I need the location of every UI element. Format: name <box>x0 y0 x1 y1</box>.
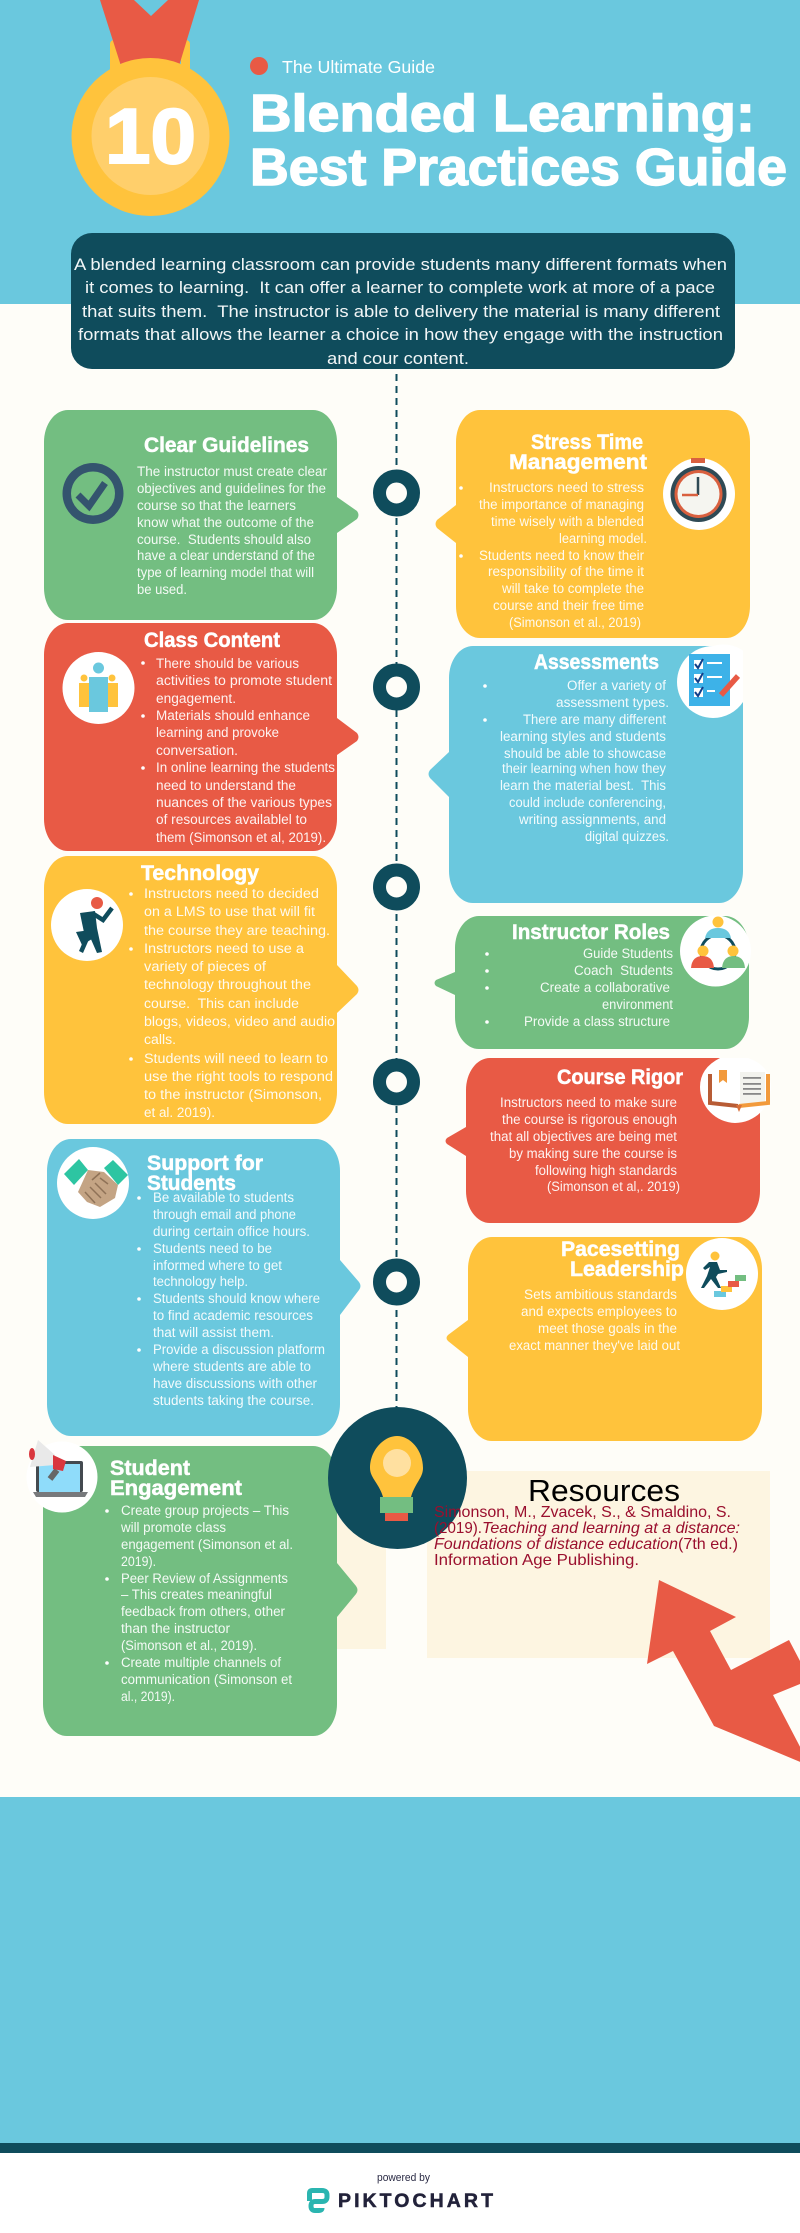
text: class content: Materials should enhance <box>156 708 310 723</box>
text: support for students <box>137 1190 325 1408</box>
text: instructor roles: Coach Students <box>574 963 673 978</box>
panel: assessments <box>428 645 743 903</box>
icon: medal <box>72 0 230 216</box>
heading: clear guidelines: Clear Guidelines <box>144 434 309 457</box>
text: student engagement: 2019). <box>121 1554 156 1569</box>
text: course rigor: Instructors need to make sure <box>500 1095 677 1110</box>
text: pacesetting leadership: Sets ambitious standards <box>524 1287 677 1302</box>
panel: resources background <box>427 1471 770 1658</box>
text: citation: (2019). <box>434 1520 482 1537</box>
text: student engagement: al., 2019). <box>121 1689 175 1704</box>
heading: pacesetting leadership: Pacesetting <box>561 1238 680 1261</box>
text: technology: Students will need to learn to <box>144 1051 328 1066</box>
text: instructor roles <box>485 946 673 1029</box>
text: course rigor: the course is rigorous enough <box>502 1112 677 1127</box>
icon: business person <box>51 889 123 961</box>
text: technology: on a LMS to use that will fit <box>144 904 315 919</box>
panel: introduction <box>71 233 735 369</box>
title: Best Practices Guide <box>250 139 787 197</box>
text: citation: Simonson, M., Zvacek, S., & Smaldino, S. <box>434 1504 731 1521</box>
text: course rigor: (Simonson et al,. 2019) <box>547 1179 680 1194</box>
text: course rigor: following high standards <box>535 1163 677 1178</box>
text: class content: engagement. <box>156 691 236 706</box>
heading: pacesetting leadership: Leadership <box>570 1258 684 1281</box>
icon: book <box>700 1058 771 1123</box>
footer: powered by: powered by <box>377 2172 430 2184</box>
timeline node 1 <box>380 476 414 510</box>
text: citation: (7th ed.) <box>678 1536 738 1553</box>
text: technology: Instructors need to use a <box>144 941 305 956</box>
text: technology: calls. <box>144 1032 176 1047</box>
title <box>250 85 787 197</box>
text: support for students: have discussions with other <box>153 1376 317 1391</box>
text: support for students: during certain office hours. <box>153 1224 310 1239</box>
text: technology: course. This can include <box>144 996 299 1011</box>
heading: support for students: Students <box>147 1172 236 1195</box>
text: student engagement: Peer Review of Assignments <box>121 1571 288 1586</box>
heading: technology: Technology <box>141 862 259 885</box>
heading: student engagement <box>110 1457 242 1500</box>
heading: student engagement: Student <box>110 1457 190 1480</box>
text: support for students: Be available to students <box>153 1190 294 1205</box>
text: support for students: technology help. <box>153 1274 248 1289</box>
text: assessments: digital quizzes. <box>585 829 669 844</box>
text: assessments: learn the material best. This <box>500 778 666 793</box>
heading: support for students: Support for <box>147 1152 263 1175</box>
text: class content: There should be various <box>156 656 299 671</box>
panel: introduction: formats that allows the learner a choice in how they engage with the instruction <box>78 326 723 344</box>
heading: stress time management: Management <box>509 451 647 474</box>
panel: course rigor <box>446 1058 771 1223</box>
text: student engagement: Create multiple channels of <box>121 1655 281 1670</box>
text: citation: Information Age Publishing. <box>434 1552 639 1569</box>
subtitle: The Ultimate Guide <box>282 57 435 77</box>
text: pacesetting leadership: and expects employees to <box>521 1304 677 1319</box>
text: student engagement: Create group projects – This <box>121 1503 289 1518</box>
text: clear guidelines <box>137 464 327 597</box>
text: stress time management: the importance of managing <box>479 497 644 512</box>
text: student engagement: will promote class <box>120 1520 226 1535</box>
text: student engagement: feedback from others, other <box>121 1604 285 1619</box>
text: clear guidelines: course. Students should also <box>137 532 311 547</box>
text: student engagement: (Simonson et al., 2019). <box>121 1638 257 1653</box>
text: clear guidelines: have a clear understand of the <box>137 548 315 563</box>
text: support for students: through email and phone <box>153 1207 296 1222</box>
footer blue band <box>0 1797 800 2143</box>
text: support for students: Provide a discussion platform <box>153 1342 325 1357</box>
heading: stress time management: Stress Time <box>531 431 643 454</box>
text: student engagement: communication (Simonson et <box>121 1672 292 1687</box>
text: assessments <box>483 678 669 844</box>
text: assessments: assessment types. <box>556 695 669 710</box>
text: class content: them (Simonson et al, 2019). <box>156 830 326 845</box>
panel: clear guidelines <box>44 410 358 620</box>
text: stress time management: will take to complete the <box>501 581 644 596</box>
panel: introduction: A blended learning classroom can provide students many different formats when <box>74 256 727 274</box>
text: stress time management: learning model. <box>559 531 647 546</box>
text: technology: variety of pieces of <box>144 959 266 974</box>
text: clear guidelines: know what the outcome of the <box>137 515 314 530</box>
text: instructor roles: Create a collaborative <box>540 980 670 995</box>
text: pacesetting leadership: meet those goals in the <box>538 1321 677 1336</box>
panel: support for students <box>47 1139 360 1436</box>
text: clear guidelines: type of learning model that will <box>137 565 314 580</box>
text: support for students: Students should know where <box>153 1291 320 1306</box>
text: student engagement: engagement (Simonson et al. <box>121 1537 293 1552</box>
text: course rigor: by making sure the course is <box>509 1146 677 1161</box>
panel: instructor roles <box>434 916 751 1049</box>
text: student engagement: – This creates meaningful <box>121 1587 272 1602</box>
text: class content: conversation. <box>156 743 238 758</box>
panel: introduction: that suits them. The instructor is able to delivery the material is many different <box>82 303 720 321</box>
panel: class content <box>44 623 358 851</box>
text: class content: activities to promote student <box>156 673 332 688</box>
text: stress time management <box>459 480 647 630</box>
panel: pacesetting leadership <box>446 1237 762 1441</box>
heading: instructor roles: Instructor Roles <box>512 921 670 944</box>
text: class content: In online learning the students <box>156 760 335 775</box>
heading: class content: Class Content <box>144 629 280 652</box>
footer dark bar <box>0 2143 800 2153</box>
heading: course rigor: Course Rigor <box>557 1066 683 1089</box>
heading: support for students <box>147 1152 263 1195</box>
panel: introduction: and cour content. <box>327 350 469 368</box>
text: citation: Foundations of distance education <box>434 1536 678 1553</box>
panel: stress time management <box>436 410 750 638</box>
text: stress time management: Instructors need to stress <box>489 480 644 495</box>
heading: pacesetting leadership <box>561 1238 684 1281</box>
panel: left cream block <box>100 1490 386 1649</box>
header background <box>0 0 800 304</box>
title: Blended Learning: <box>250 85 755 143</box>
text: technology: Instructors need to decided <box>144 886 319 901</box>
icon: stopwatch <box>663 458 735 530</box>
icon: checklist <box>677 645 743 718</box>
text: pacesetting leadership <box>509 1287 680 1353</box>
timeline node 2 <box>380 670 414 704</box>
text: assessments: their learning when how they <box>502 761 666 776</box>
text: instructor roles: Provide a class structure <box>524 1014 670 1029</box>
heading: resources: Resources <box>528 1473 680 1508</box>
text: class content: learning and provoke <box>156 725 279 740</box>
text: technology: use the right tools to respond <box>144 1069 333 1084</box>
text: instructor roles: environment <box>602 997 673 1012</box>
text: support for students: informed where to get <box>153 1258 282 1273</box>
timeline node 5 <box>380 1265 414 1299</box>
text: technology: to the instructor (Simonson, <box>144 1087 322 1102</box>
icon: handshake <box>57 1147 129 1219</box>
text: instructor roles: Guide Students <box>583 946 673 961</box>
icon: runner on stairs <box>686 1238 758 1310</box>
footer: piktochart logo: PIKTOCHART <box>338 2190 493 2212</box>
text: citation <box>434 1504 740 1569</box>
text: class content: of resources availablel to <box>156 812 307 827</box>
text: assessments: Offer a variety of <box>567 678 666 693</box>
timeline node 3 <box>380 870 414 904</box>
icon: laptop and megaphone <box>26 1440 98 1512</box>
text: stress time management: Students need to know their <box>479 548 644 563</box>
icon: medal: 10 <box>105 92 196 180</box>
text: technology: et al. 2019). <box>144 1105 215 1120</box>
timeline dashed line <box>396 374 398 1410</box>
arrow <box>647 1580 800 1766</box>
text: clear guidelines: objectives and guidelines for the <box>137 481 326 496</box>
text: assessments: should be able to showcase <box>504 746 666 761</box>
text: class content: need to understand the <box>156 778 296 793</box>
heading: stress time management <box>509 431 647 474</box>
text: support for students: where students are able to <box>152 1359 311 1374</box>
heading: student engagement: Engagement <box>110 1477 242 1500</box>
text: stress time management: time wisely with a blended <box>491 514 644 529</box>
text: course rigor <box>490 1095 680 1194</box>
icon: team <box>680 916 751 986</box>
text: clear guidelines: be used. <box>137 582 187 597</box>
panel: student engagement <box>26 1440 358 1736</box>
text: technology: the course they are teaching. <box>144 923 330 938</box>
text: stress time management: (Simonson et al., 2019) <box>509 615 641 630</box>
timeline node 4 <box>380 1065 414 1099</box>
text: course rigor: that all objectives are being met <box>490 1129 677 1144</box>
text: stress time management: course and their free time <box>493 598 644 613</box>
text: support for students: to find academic resources <box>153 1308 313 1323</box>
text: pacesetting leadership: exact manner they've laid out <box>509 1338 680 1353</box>
text: technology: technology throughout the <box>144 977 311 992</box>
text: support for students: students taking the course. <box>153 1393 314 1408</box>
text: assessments: could include conferencing, <box>509 795 666 810</box>
text: clear guidelines: The instructor must create clear <box>137 464 327 479</box>
icon: light bulb <box>328 1407 467 1549</box>
icon: check mark <box>62 463 124 524</box>
text: citation: Teaching and learning at a distance: <box>482 1520 740 1537</box>
text: student engagement <box>105 1503 293 1704</box>
text: stress time management: responsibility of the time it <box>488 564 644 579</box>
text: student engagement: than the instructor <box>121 1621 231 1636</box>
text: clear guidelines: course so that the learners <box>137 498 296 513</box>
text: class content: nuances of the various types <box>156 795 332 810</box>
text: assessments: learning styles and students <box>500 729 666 744</box>
heading: assessments: Assessments <box>534 651 659 674</box>
panel: technology <box>44 856 358 1124</box>
icon: people <box>62 652 134 724</box>
panel: introduction: it comes to learning. It can offer a learner to complete work at more of a pace <box>85 279 715 297</box>
text: assessments: There are many different <box>523 712 666 727</box>
text: support for students: Students need to be <box>153 1241 272 1256</box>
text: assessments: writing assignments, and <box>518 812 666 827</box>
text: technology <box>129 886 335 1120</box>
text: class content <box>141 656 335 845</box>
text: technology: blogs, videos, video and audio <box>144 1014 335 1029</box>
text: support for students: that will assist them. <box>153 1325 274 1340</box>
